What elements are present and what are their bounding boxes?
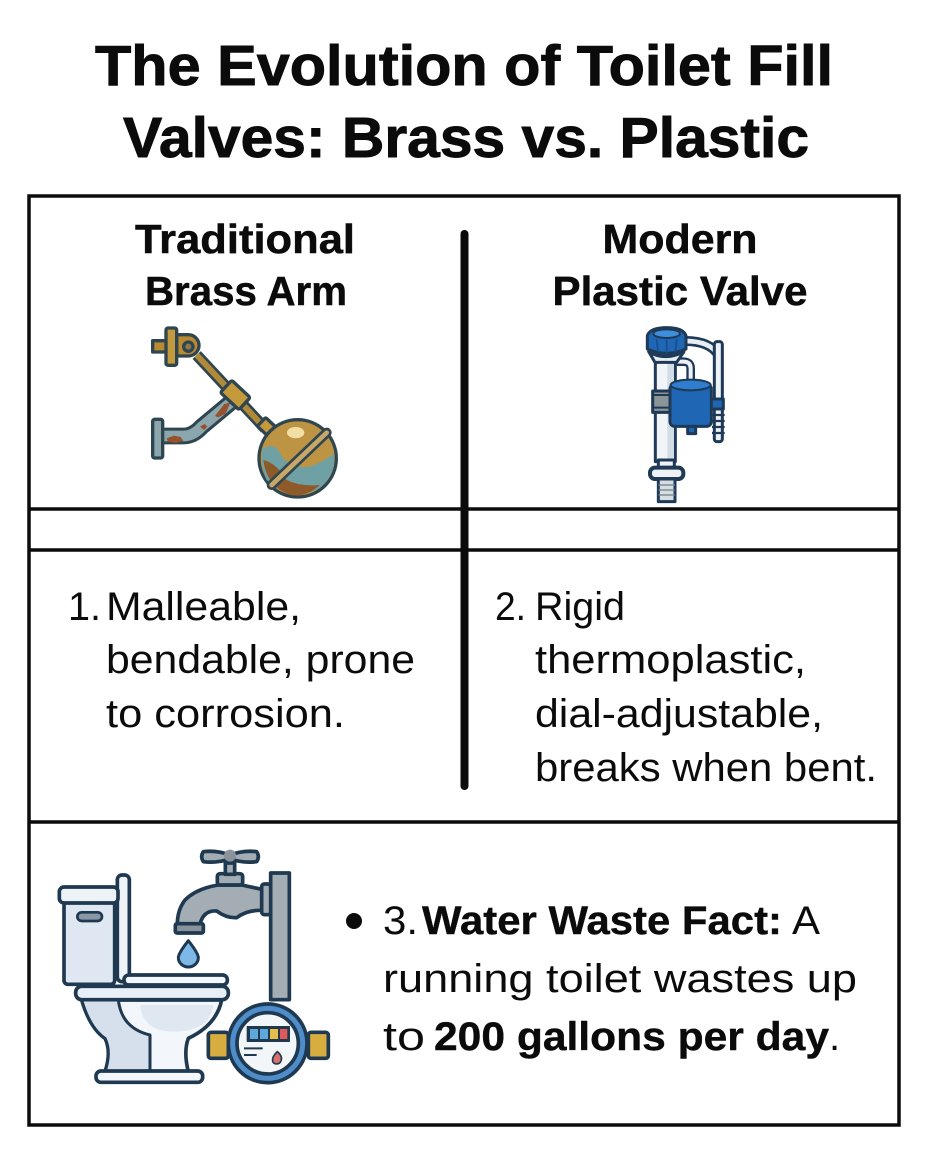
title: The Evolution of Toilet Fill bbox=[95, 34, 833, 98]
drop bbox=[178, 941, 198, 967]
heading: traditional brass arm bbox=[135, 216, 355, 314]
text: water waste fact bbox=[383, 899, 857, 1059]
wall pipe bbox=[271, 873, 289, 1000]
text: plastic valve description: Rigid bbox=[535, 585, 625, 629]
text: brass arm description: Malleable, bbox=[106, 585, 301, 629]
text: water waste fact: to bbox=[383, 1015, 425, 1059]
meter bbox=[208, 1032, 228, 1058]
text: plastic valve description: breaks when bent. bbox=[535, 746, 877, 790]
text: plastic valve description: 2. bbox=[495, 585, 526, 629]
text: water waste fact: 3. bbox=[383, 899, 418, 943]
text: water waste fact: . bbox=[829, 1015, 840, 1059]
text: plastic valve description: thermoplastic, bbox=[535, 638, 806, 682]
bullet bbox=[346, 913, 362, 929]
tank bbox=[64, 902, 115, 984]
heading: modern plastic valve: Modern bbox=[602, 216, 758, 262]
heading: modern plastic valve bbox=[552, 216, 808, 314]
text: water waste fact: A bbox=[792, 899, 820, 943]
seat bbox=[124, 975, 227, 985]
text: brass arm description bbox=[68, 585, 415, 736]
back pipe bbox=[117, 875, 129, 982]
faucet bbox=[262, 884, 271, 915]
text: brass arm description: to corrosion. bbox=[106, 692, 345, 736]
heading: modern plastic valve: Plastic Valve bbox=[552, 268, 808, 314]
text: brass arm description: bendable, prone bbox=[106, 638, 415, 682]
bowl bbox=[82, 1000, 222, 1072]
text: water waste fact: 200 gallons per day bbox=[434, 1015, 830, 1059]
icon: toilet, dripping faucet and water meter bbox=[59, 850, 328, 1083]
icon: plastic fill valve bbox=[647, 328, 725, 502]
heading: traditional brass arm: Brass Arm bbox=[145, 268, 347, 314]
title: Valves: Brass vs. Plastic bbox=[123, 106, 809, 170]
icon: brass float arm bbox=[153, 328, 336, 497]
text: water waste fact: Water Waste Fact: bbox=[422, 899, 782, 943]
text: brass arm description: 1. bbox=[68, 585, 101, 629]
text: water waste fact: running toilet wastes up bbox=[383, 957, 857, 1001]
heading: traditional brass arm: Traditional bbox=[135, 216, 355, 262]
text: plastic valve description: dial-adjustable, bbox=[535, 692, 823, 736]
title bbox=[95, 34, 833, 170]
comparison table frame bbox=[29, 196, 899, 1125]
text: plastic valve description bbox=[495, 585, 877, 790]
